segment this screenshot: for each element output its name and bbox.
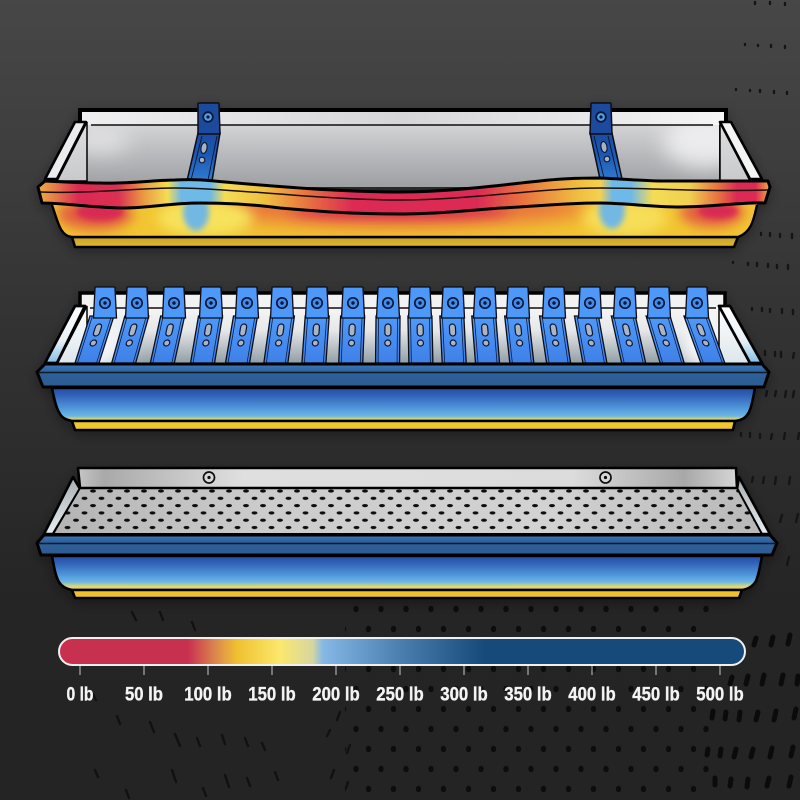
wavy front lip	[38, 178, 770, 214]
gutter body	[52, 556, 762, 590]
scale labels: 450 lb	[632, 684, 680, 706]
scale labels	[66, 684, 744, 706]
fastener left	[204, 472, 214, 483]
scale labels: 150 lb	[248, 684, 296, 706]
scale labels: 350 lb	[504, 684, 552, 706]
gutter body	[52, 388, 755, 421]
inner wall highlights	[70, 116, 747, 168]
legend: load scale	[59, 638, 745, 706]
back wall band	[80, 293, 725, 308]
scale ticks	[80, 666, 720, 675]
colour bar	[59, 638, 745, 665]
inner wall	[87, 125, 719, 187]
bottom strip	[72, 590, 742, 598]
scale labels: 50 lb	[125, 684, 163, 706]
scale labels: 0 lb	[66, 684, 94, 706]
right end cap	[719, 306, 762, 364]
perforated screen	[53, 488, 762, 534]
left end cap	[45, 306, 87, 364]
lip fold line	[39, 372, 767, 374]
scale labels: 400 lb	[568, 684, 616, 706]
scale labels: 200 lb	[312, 684, 360, 706]
back plate	[78, 468, 737, 488]
inner wall	[87, 308, 719, 364]
lip fold line	[40, 188, 768, 200]
hanger row	[75, 287, 725, 363]
bottom strip	[72, 237, 738, 247]
right end cap	[737, 477, 770, 534]
fastener right	[600, 472, 611, 483]
back wall upper band	[80, 110, 726, 125]
bottom strip	[72, 421, 735, 430]
scale labels: 500 lb	[696, 684, 744, 706]
lip fold line	[39, 542, 775, 544]
wall seam line	[90, 307, 716, 309]
wall fade at ends	[100, 323, 718, 362]
gutter 2: eighteen hangers	[37, 287, 769, 430]
gutter body heat map	[52, 204, 757, 240]
left end cap	[45, 122, 87, 181]
hanger right	[590, 103, 622, 179]
front lip	[37, 535, 777, 555]
scale labels: 250 lb	[376, 684, 424, 706]
front lip	[37, 364, 769, 387]
wall seam line	[91, 124, 713, 126]
scale labels: 300 lb	[440, 684, 488, 706]
gutter 1: two hangers with heat map	[38, 103, 770, 247]
gutter 3: perforated cover	[37, 468, 777, 598]
scale labels: 100 lb	[184, 684, 232, 706]
gutter body outline	[52, 205, 757, 237]
left end cap	[44, 477, 80, 534]
hanger left	[187, 103, 220, 181]
right end cap	[720, 122, 762, 181]
